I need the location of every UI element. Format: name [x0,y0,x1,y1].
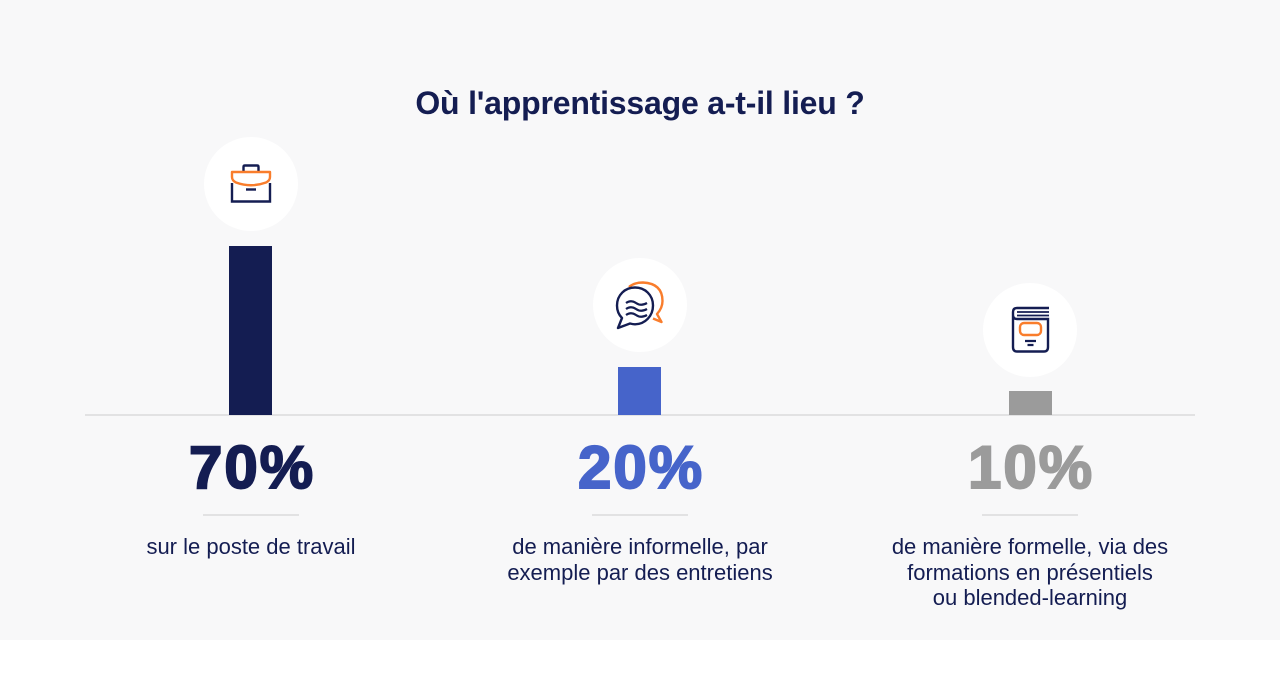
label: de manière formelle: formations en présentiels [907,560,1153,584]
label: sur le poste de travail: sur le poste de travail [146,534,356,559]
baseline axis [85,414,1195,416]
label: de manière informelle: exemple par des entretiens [507,560,773,584]
label: de manière informelle [507,534,773,584]
column: 70% [146,164,356,559]
label: de manière formelle [892,534,1168,610]
divider [982,514,1078,516]
percentage: 20%: 20% [578,434,704,501]
title: Où l'apprentissage a-t-il lieu ? [415,85,865,121]
percentage: 70%: 70% [189,434,315,501]
percentage: 10%: 10% [968,434,1094,501]
column: 20% [507,281,773,584]
divider [592,514,688,516]
label: de manière formelle: ou blended-learning [933,585,1127,610]
icon: book [1012,306,1050,353]
icon: briefcase [230,164,272,203]
bar: 20% [618,367,661,415]
bar: 70% [229,246,272,415]
bar: 10% [1009,391,1052,415]
label: de manière formelle: de manière formelle, via des [892,534,1168,559]
icon: speech bubbles [616,281,664,330]
column: 10% [892,306,1168,610]
label: de manière informelle: de manière informelle, par [512,534,768,559]
divider [203,514,299,516]
